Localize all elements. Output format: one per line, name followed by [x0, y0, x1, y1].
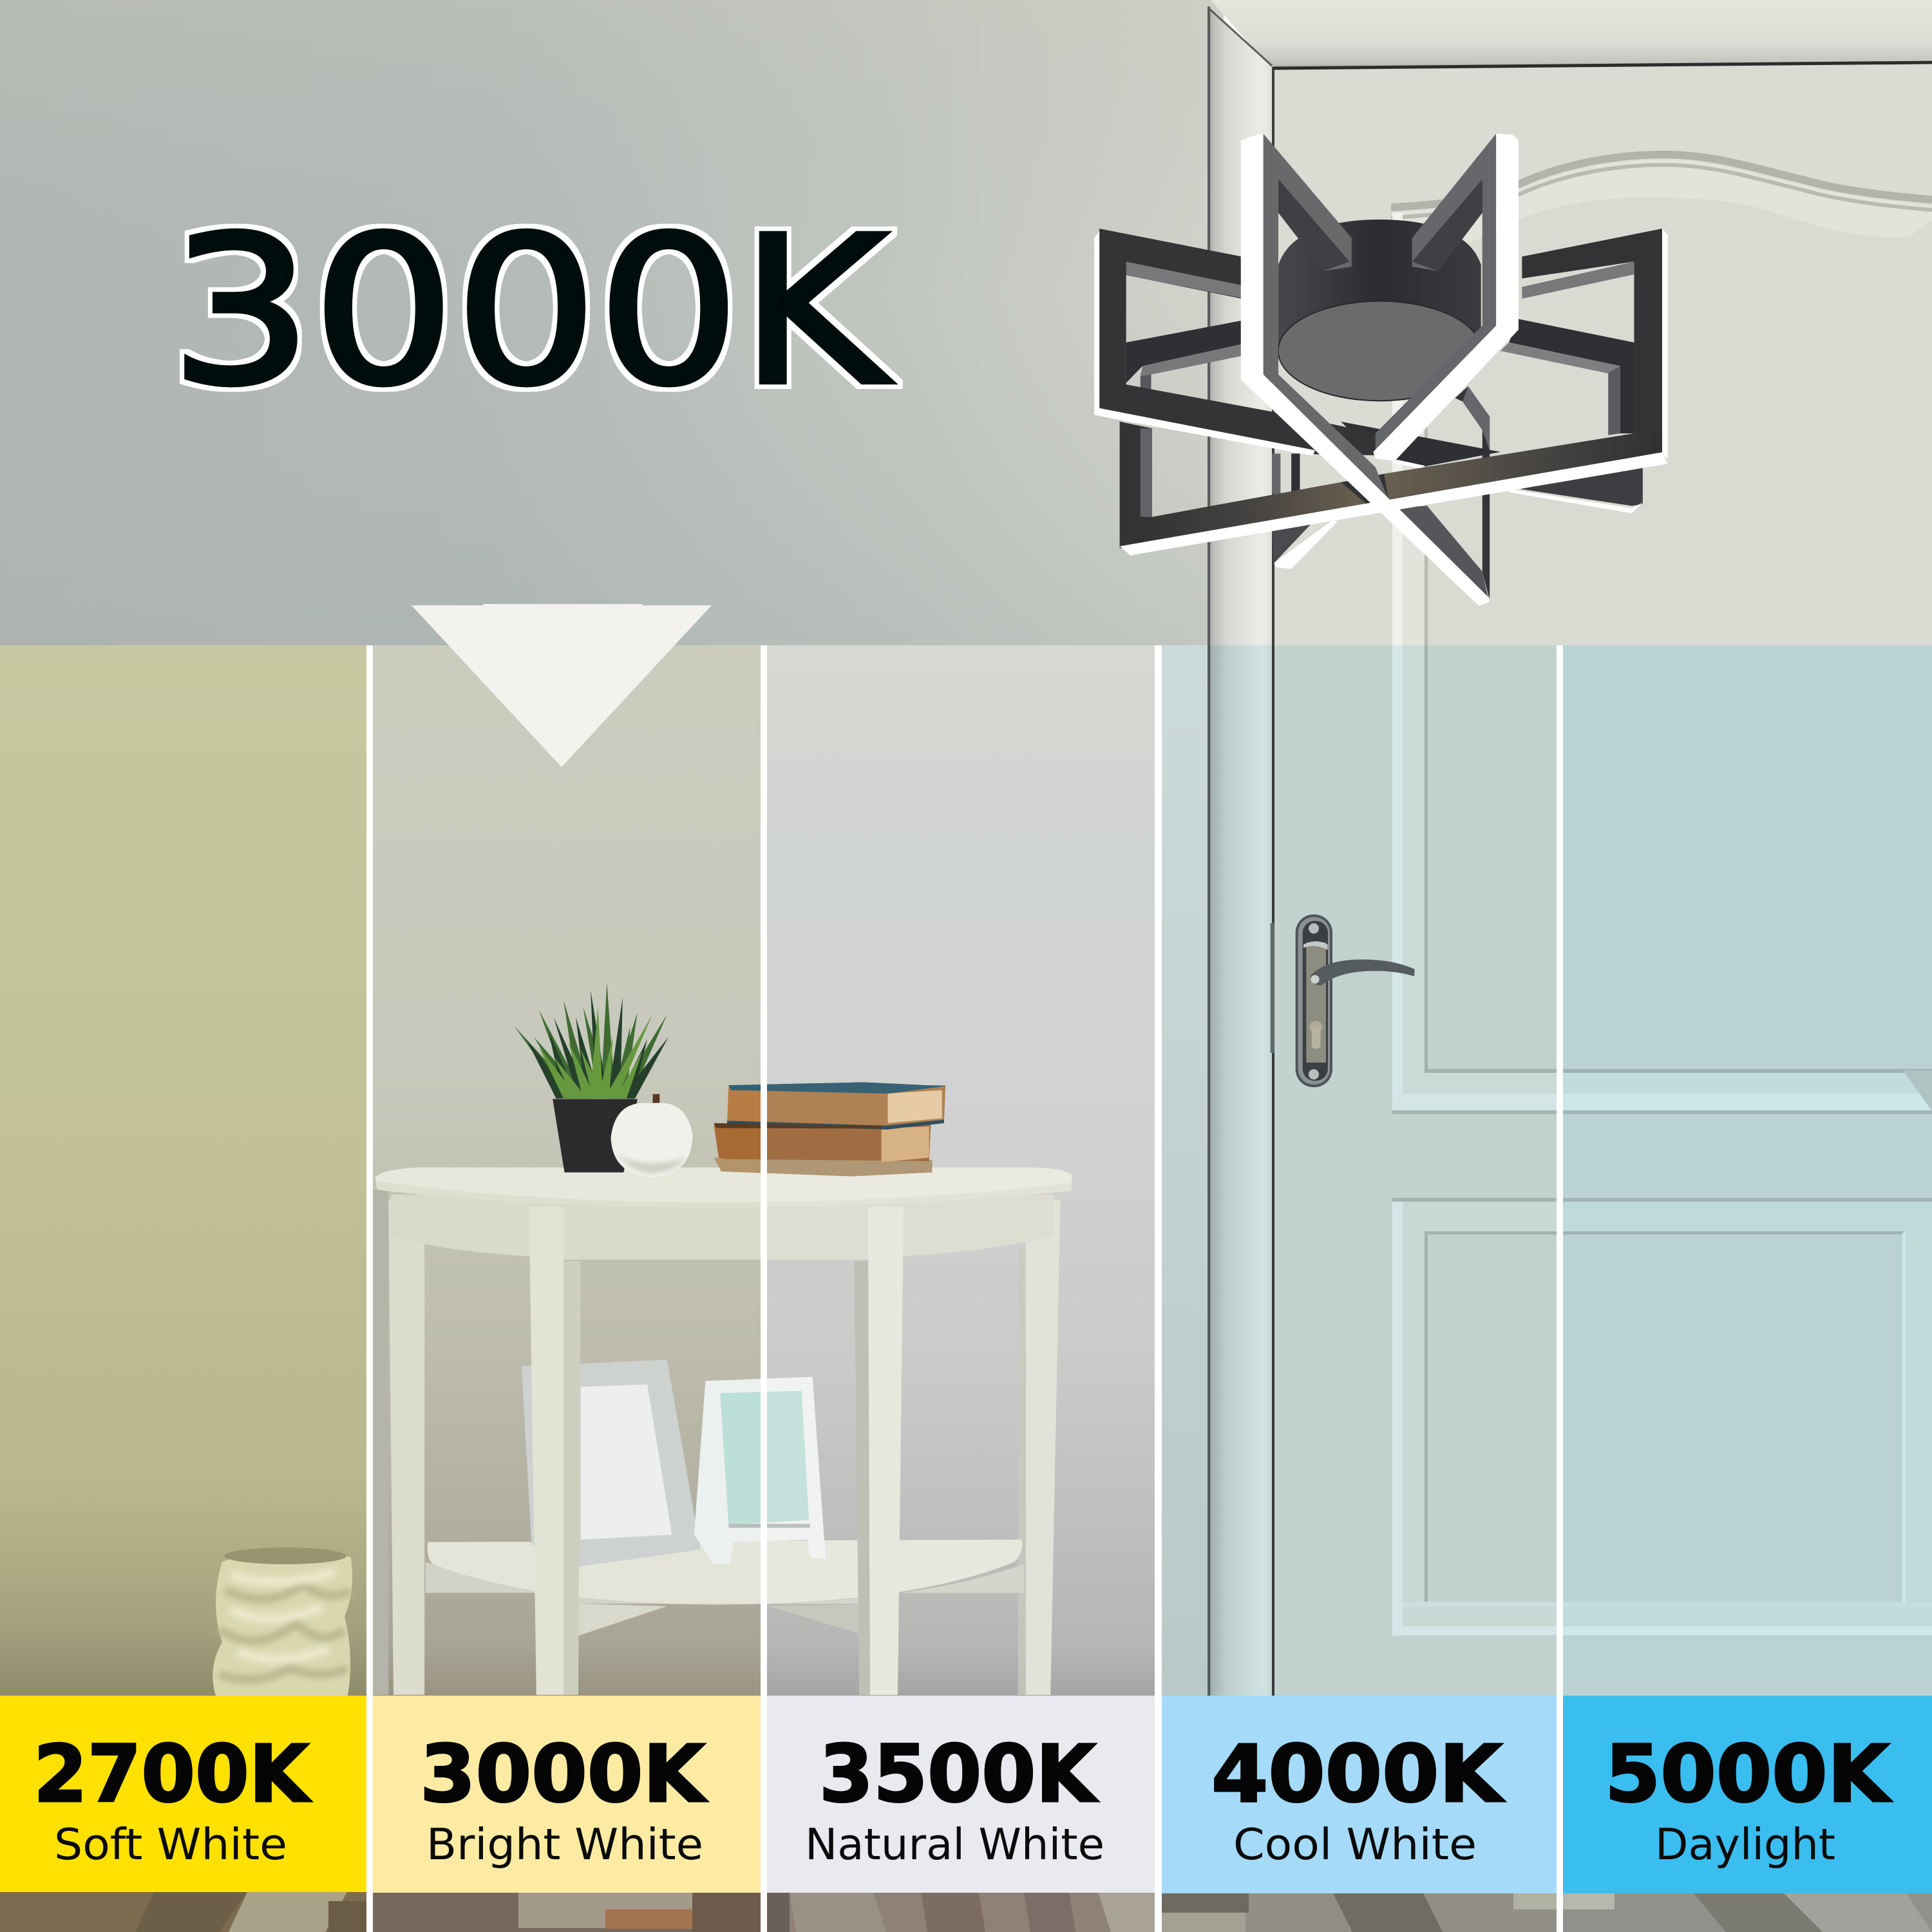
icon: door handle	[1271, 914, 1415, 1087]
selector arrow	[412, 604, 712, 767]
table apron	[391, 1195, 1054, 1260]
band: 2700K soft white: Soft White	[54, 1819, 287, 1870]
neutral-toned table section	[767, 1082, 1055, 1695]
picture frames	[522, 1359, 826, 1567]
lower door panel	[1392, 1198, 1932, 1636]
door leaf	[1273, 64, 1932, 1703]
vertical door casing	[1208, 6, 1272, 1703]
band: 3500K natural white: Natural White	[805, 1819, 1104, 1870]
wall background	[0, 0, 1224, 1701]
band: 3500K natural white: 3500K	[819, 1728, 1099, 1820]
band: 3000K bright white: Bright White	[426, 1819, 703, 1870]
band: 3000K bright white	[373, 1696, 761, 1893]
band: 4000K cool white	[1162, 1696, 1557, 1893]
door and frame	[1208, 0, 1932, 1703]
right upper fixture arm	[1373, 134, 1519, 461]
casing and door edge lines	[1208, 6, 1932, 1703]
glowing lower strip	[1120, 452, 1668, 555]
front fixture bar	[1384, 433, 1662, 499]
long lower fixture frame	[1120, 229, 1662, 549]
plant in pot	[514, 983, 668, 1173]
band: 4000K cool white: Cool White	[1233, 1819, 1477, 1870]
door cool tint overlays	[1208, 645, 1932, 1701]
band: 5000K daylight: 5000K	[1605, 1728, 1893, 1820]
band: 3000K bright white: 3000K	[420, 1728, 708, 1820]
title: 3000K	[170, 193, 894, 430]
band: 2700K soft white: 2700K	[33, 1728, 312, 1820]
band: 2700K soft white	[0, 1696, 366, 1892]
back arms of fixture	[1126, 319, 1643, 600]
band: 5000K daylight: Daylight	[1655, 1819, 1835, 1870]
table back legs	[373, 1189, 1060, 1695]
lower shelf	[426, 1540, 1025, 1636]
divider lines	[366, 645, 1563, 1932]
table top	[375, 1168, 1072, 1208]
band: 3500K natural white	[767, 1696, 1155, 1893]
left upper fixture arm	[1241, 134, 1490, 606]
vase	[213, 1548, 352, 1696]
upper door panel	[1391, 155, 1932, 1114]
band: 5000K daylight	[1563, 1696, 1932, 1893]
table front legs	[529, 1207, 904, 1695]
stacked books	[714, 1083, 945, 1177]
console table with decor	[373, 983, 1072, 1695]
light fixture	[1094, 134, 1668, 606]
ceramic apple	[611, 1094, 693, 1177]
band: 4000K cool white: 4000K	[1211, 1728, 1506, 1820]
fixture canopy	[1278, 220, 1482, 401]
top door casing	[1211, 0, 1932, 70]
left fixture frame	[1094, 229, 1376, 456]
wooden floor	[0, 1891, 1932, 1932]
